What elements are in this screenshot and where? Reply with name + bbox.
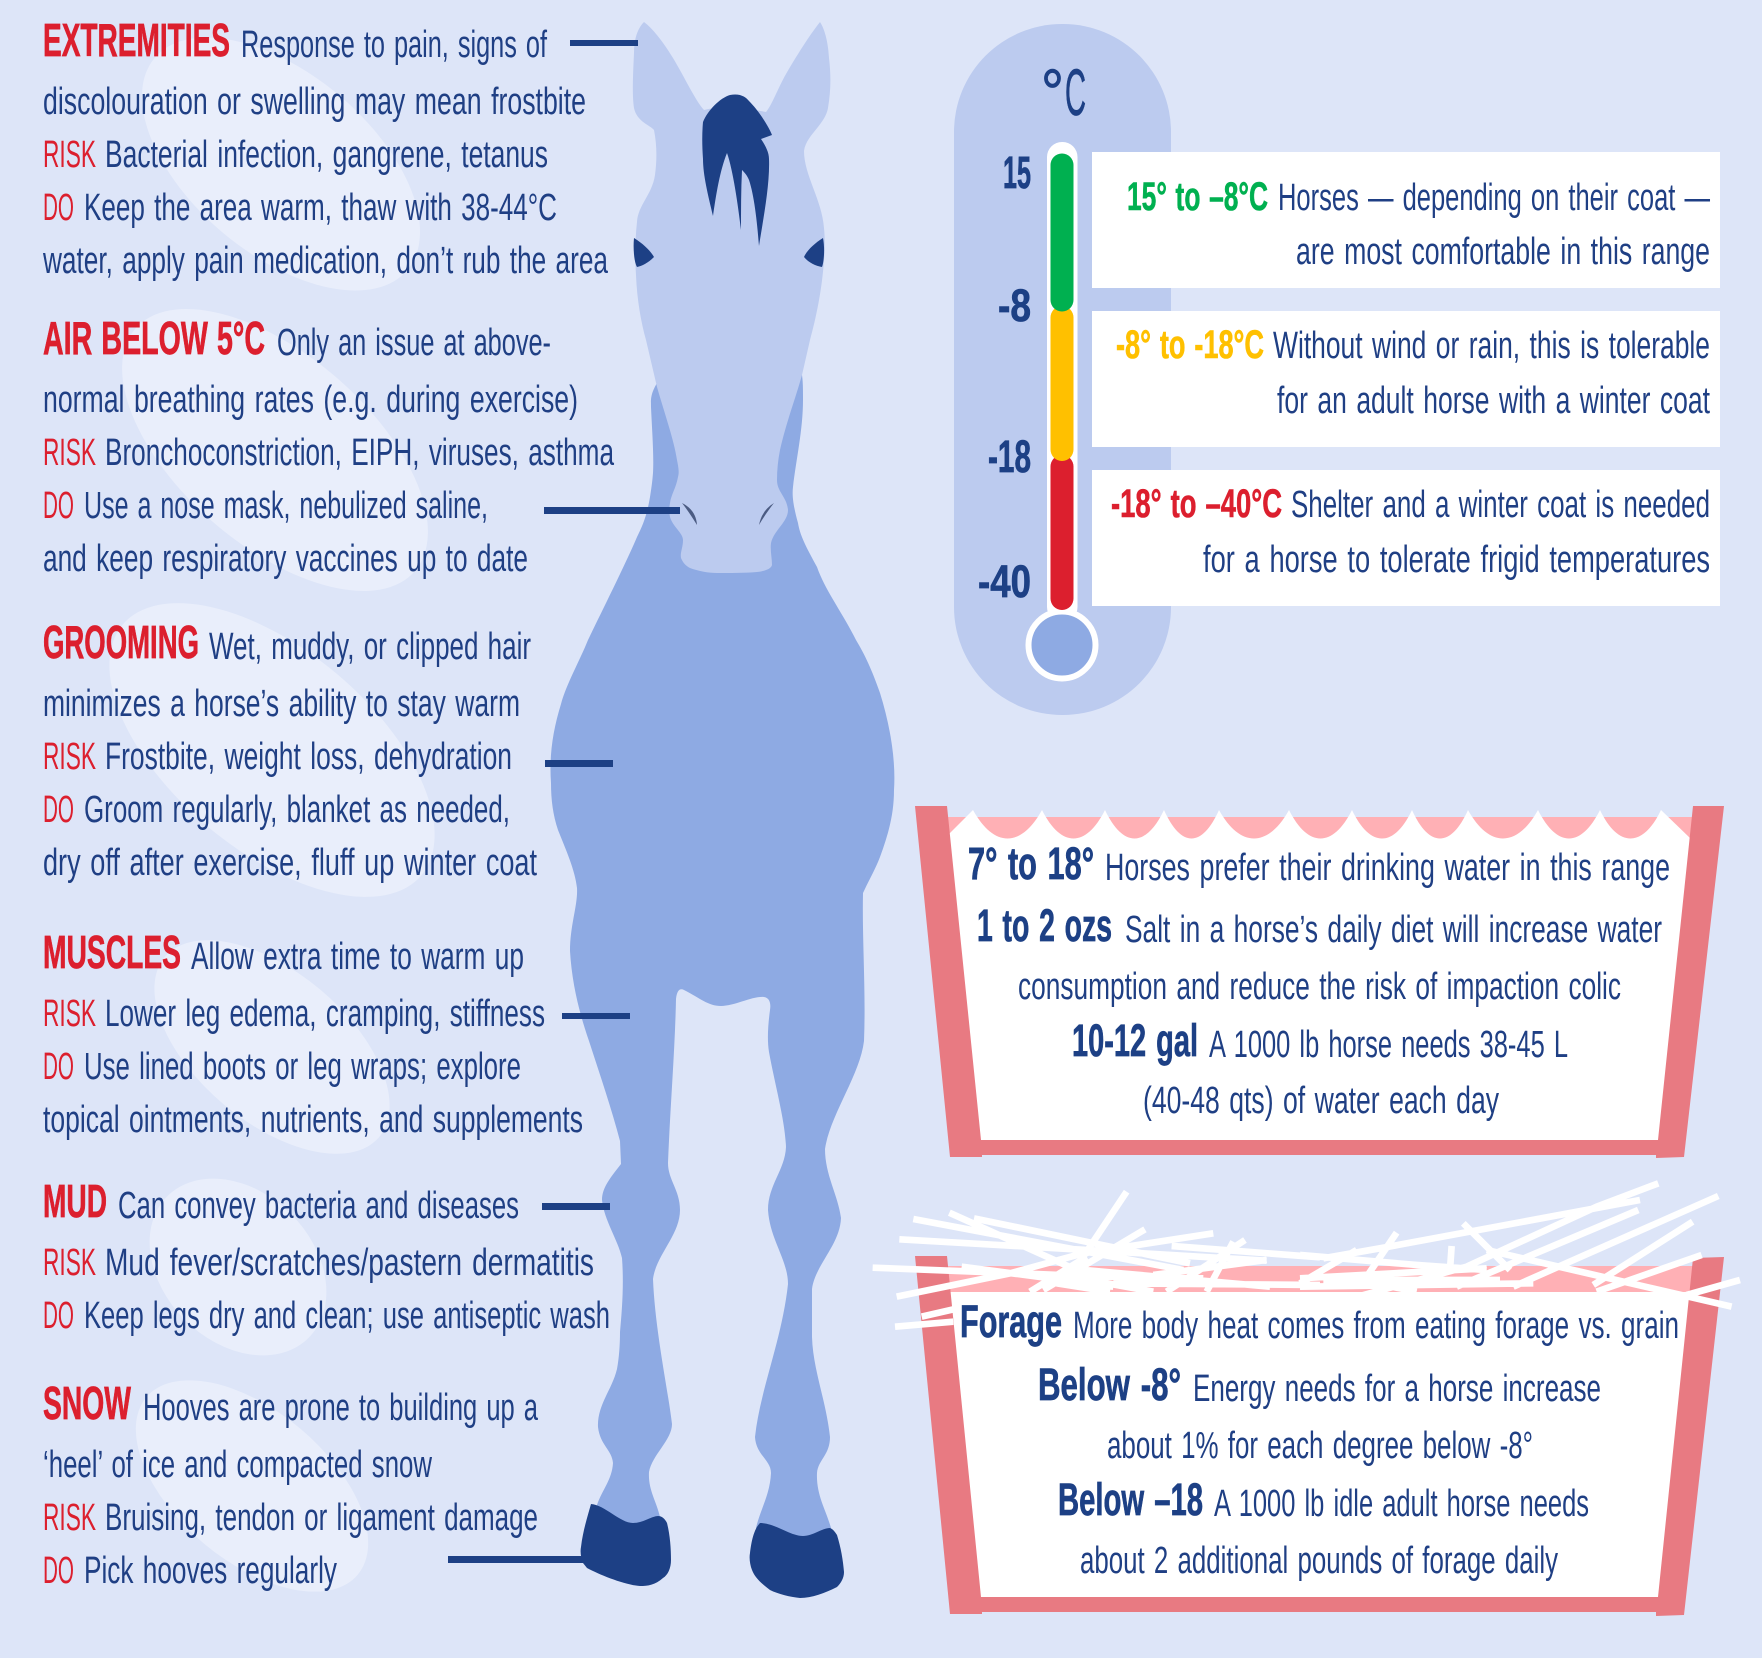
- text: snow details: Hooves are prone to building up a: [143, 1387, 539, 1429]
- text: feed facts: Below –18: [1058, 1474, 1203, 1525]
- forelock: [702, 94, 772, 246]
- heading: snow: SNOW: [43, 1377, 131, 1429]
- text: snow details: DO: [43, 1550, 74, 1592]
- unit label: °: [1041, 55, 1064, 129]
- text: water facts: 10-12 gal: [1072, 1015, 1198, 1066]
- text: water facts: A 1000 lb horse needs 38-45 L: [1209, 1024, 1568, 1066]
- text: muscles details: RISK: [43, 993, 96, 1035]
- connector lines: [448, 40, 680, 1563]
- scale numbers: 15: [1003, 147, 1031, 198]
- text: extremities details: Bacterial infection, gangrene, tetanus: [105, 134, 548, 176]
- text: air details: RISK: [43, 432, 96, 474]
- heading: grooming: GROOMING: [43, 616, 199, 668]
- bucket frame: [915, 1256, 1724, 1616]
- text: water facts: 7° to 18°: [968, 838, 1094, 889]
- text: feed facts: [960, 1296, 1679, 1582]
- thermometer tube: [1047, 142, 1078, 622]
- text: red range: [1203, 484, 1710, 581]
- text: extremities details: RISK: [43, 134, 96, 176]
- panel: mud: [43, 1175, 610, 1337]
- bucket interior: [950, 1292, 1690, 1602]
- scale numbers: [978, 147, 1031, 607]
- text: snow details: [43, 1387, 539, 1592]
- text: grooming details: DO: [43, 789, 74, 831]
- panel: snow: [43, 1377, 539, 1592]
- text: muscles details: Lower leg edema, cramping, stiffness: [105, 993, 545, 1035]
- text: water facts: (40-48 qts) of water each day: [1143, 1080, 1499, 1122]
- nostrils: [682, 503, 774, 525]
- panel: grooming: [43, 616, 537, 884]
- heading: green range: 15° to –8°C: [1127, 175, 1268, 219]
- scale numbers: -18: [988, 431, 1031, 482]
- scale numbers: -40: [978, 556, 1031, 607]
- text: green range: [1278, 177, 1710, 273]
- heading: extremities: EXTREMITIES: [43, 14, 230, 66]
- text: feed facts: A 1000 lb idle adult horse needs: [1214, 1483, 1589, 1525]
- horse head: [633, 22, 830, 573]
- red band: [1050, 455, 1074, 610]
- thermometer bulb: [1028, 612, 1096, 678]
- hay straws: [873, 1183, 1740, 1327]
- text: air details: and keep respiratory vaccines up to date: [43, 538, 528, 580]
- panel: yellow range: [1092, 311, 1720, 447]
- thermometer: [954, 24, 1171, 715]
- text: snow details: RISK: [43, 1497, 96, 1539]
- horse body and legs: [550, 360, 894, 1542]
- panel: red range: [1092, 470, 1720, 606]
- text: mud details: RISK: [43, 1242, 96, 1284]
- water surface: [947, 817, 1693, 847]
- text: air details: Bronchoconstriction, EIPH, viruses, asthma: [105, 432, 615, 474]
- panel: extremities: [42, 14, 609, 282]
- text: grooming details: [43, 626, 537, 884]
- bucket frame: [915, 806, 1724, 1158]
- text: air details: normal breathing rates (e.g. during exercise): [43, 379, 578, 421]
- panel: green range: [1092, 152, 1720, 288]
- text: grooming details: minimizes a horse’s ability to stay warm: [43, 683, 520, 725]
- text: grooming details: Wet, muddy, or clipped hair: [209, 626, 531, 668]
- text: water facts: [968, 838, 1670, 1122]
- panel: feed bucket: [873, 1183, 1740, 1616]
- text: air details: Use a nose mask, nebulized saline,: [84, 485, 488, 527]
- heading: yellow range: -8° to -18°C: [1116, 323, 1264, 367]
- hooves: [581, 1504, 844, 1598]
- panel: muscles: [43, 926, 583, 1141]
- text: snow details: Bruising, tendon or ligament damage: [105, 1497, 538, 1539]
- scale numbers: -8: [998, 280, 1031, 331]
- text: air details: [43, 322, 615, 580]
- text: muscles details: [43, 936, 583, 1141]
- text: extremities details: [42, 24, 609, 282]
- heading: red range: -18° to –40°C: [1111, 482, 1282, 526]
- panel: air below 5C: [43, 312, 615, 580]
- yellow band: [1050, 306, 1074, 461]
- text: snow details: Pick hooves regularly: [84, 1550, 337, 1592]
- text: grooming details: Frostbite, weight loss, dehydration: [105, 736, 512, 778]
- thermometer backing: [954, 24, 1171, 715]
- text: mud details: Mud fever/scratches/pastern dermatitis: [105, 1242, 594, 1284]
- green band: [1050, 154, 1074, 312]
- text: feed facts: Below -8°: [1038, 1359, 1181, 1410]
- feed strip: [947, 1266, 1693, 1296]
- text: muscles details: Use lined boots or leg wraps; explore: [84, 1046, 521, 1088]
- text: grooming details: Groom regularly, blanket as needed,: [84, 789, 510, 831]
- heading: air below 5C: AIR BELOW 5°C: [43, 312, 265, 364]
- unit label: [1041, 55, 1086, 129]
- panel: water bucket: [915, 806, 1724, 1158]
- text: extremities details: water, apply pain medication, don’t rub the area: [42, 240, 609, 282]
- heading: mud: MUD: [43, 1175, 107, 1227]
- text: muscles details: topical ointments, nutrients, and supplements: [43, 1099, 583, 1141]
- text: mud details: Can convey bacteria and diseases: [118, 1185, 519, 1227]
- text: feed facts: about 2 additional pounds of forage daily: [1080, 1540, 1558, 1582]
- text: extremities details: Response to pain, signs of: [241, 24, 547, 66]
- text: mud details: DO: [43, 1295, 74, 1337]
- text: grooming details: RISK: [43, 736, 96, 778]
- text: mud details: Keep legs dry and clean; use antiseptic wash: [84, 1295, 610, 1337]
- text: air details: DO: [43, 485, 74, 527]
- text: water facts: 1 to 2 ozs: [977, 900, 1112, 951]
- thermometer: C: [1065, 55, 1086, 129]
- text: mud details: [43, 1185, 610, 1337]
- heading: muscles: MUSCLES: [43, 926, 181, 978]
- eyes: [634, 238, 824, 267]
- text: muscles details: Allow extra time to warm up: [191, 936, 524, 978]
- text: feed facts: about 1% for each degree below -8°: [1107, 1425, 1533, 1467]
- text: yellow range: [1273, 325, 1710, 422]
- text: muscles details: DO: [43, 1046, 74, 1088]
- horse illustration: [550, 22, 894, 1598]
- text: air details: Only an issue at above-: [277, 322, 551, 364]
- bucket interior with scalloped water edge: [947, 810, 1690, 1145]
- text: feed facts: Forage: [960, 1296, 1062, 1347]
- text: extremities details: Keep the area warm, thaw with 38-44°C: [84, 187, 557, 229]
- text: extremities details: discolouration or swelling may mean frostbite: [43, 81, 586, 123]
- text: grooming details: dry off after exercise, fluff up winter coat: [43, 842, 537, 884]
- text: snow details: ‘heel’ of ice and compacted snow: [43, 1444, 432, 1486]
- text: extremities details: DO: [43, 187, 74, 229]
